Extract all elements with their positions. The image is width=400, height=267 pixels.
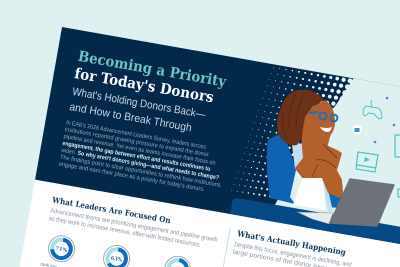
laptop base — [297, 212, 333, 224]
face — [303, 100, 335, 140]
donut: third — [163, 254, 193, 267]
hair — [277, 90, 324, 145]
laptop lid — [330, 179, 394, 226]
hair curls — [282, 94, 304, 140]
body: leaders text: as they work to increase revenue, often with limited resources. — [48, 215, 201, 249]
icon: game controller — [363, 100, 382, 119]
inner light-blue shirt — [292, 143, 304, 169]
intro paragraph: engagement, the gap between effort and results continues to — [62, 141, 211, 173]
body: leaders text: Advancement teams are prioritizing engagement and pipeline growth — [50, 207, 219, 244]
title: for Today's Donors — [73, 65, 215, 106]
glasses — [309, 112, 337, 121]
subtitle: and How to Break Through — [68, 101, 193, 134]
title: Becoming a Priority — [77, 48, 228, 91]
icon: edge right — [398, 189, 400, 197]
icon: sparkles — [374, 97, 395, 143]
intro paragraph: widen. So why aren't donors giving—and what needs to change? — [60, 148, 220, 182]
heading: what leaders are focused on: What Leaders Are Focused On — [51, 194, 172, 225]
icon: video player — [356, 152, 378, 172]
intro paragraph: The findings point to clear opportunities to rethink how institutions — [59, 155, 221, 189]
neck and chest — [301, 128, 332, 159]
intro paragraph — [57, 120, 227, 196]
forearm and hands — [295, 143, 343, 198]
subtitle: What's Holding Donors Back— — [71, 86, 206, 121]
finger lines — [296, 144, 337, 178]
donut: 71%: 71% — [55, 246, 68, 254]
smile — [320, 127, 332, 132]
halftone dots — [230, 64, 350, 212]
intro paragraph: institutions reported growing pressure to expand the donor — [64, 127, 209, 158]
light illustration background — [274, 69, 400, 267]
intro paragraph: pipeline and revenue. Yet even as teams increase their focus on — [63, 134, 216, 167]
illustration: woman at laptop — [267, 90, 394, 226]
icon: device right — [395, 135, 400, 157]
icon: thumbs up badge — [352, 124, 362, 134]
donut: 63%: 63% — [110, 256, 123, 264]
donut: 71% — [46, 234, 77, 264]
white top — [293, 164, 326, 210]
subtitle — [68, 86, 206, 136]
intro paragraph: In EAB's 2026 Advancement Leaders Survey, leaders across — [66, 120, 206, 151]
intro paragraph: engage and earn their place as a priority for today's donors. — [58, 162, 205, 193]
jacket right — [323, 177, 343, 208]
desk bar — [230, 197, 400, 267]
heading: what's actually happening: What's Actually Happening — [236, 228, 347, 257]
donut: 63% — [102, 243, 132, 267]
jacket left — [267, 135, 296, 204]
